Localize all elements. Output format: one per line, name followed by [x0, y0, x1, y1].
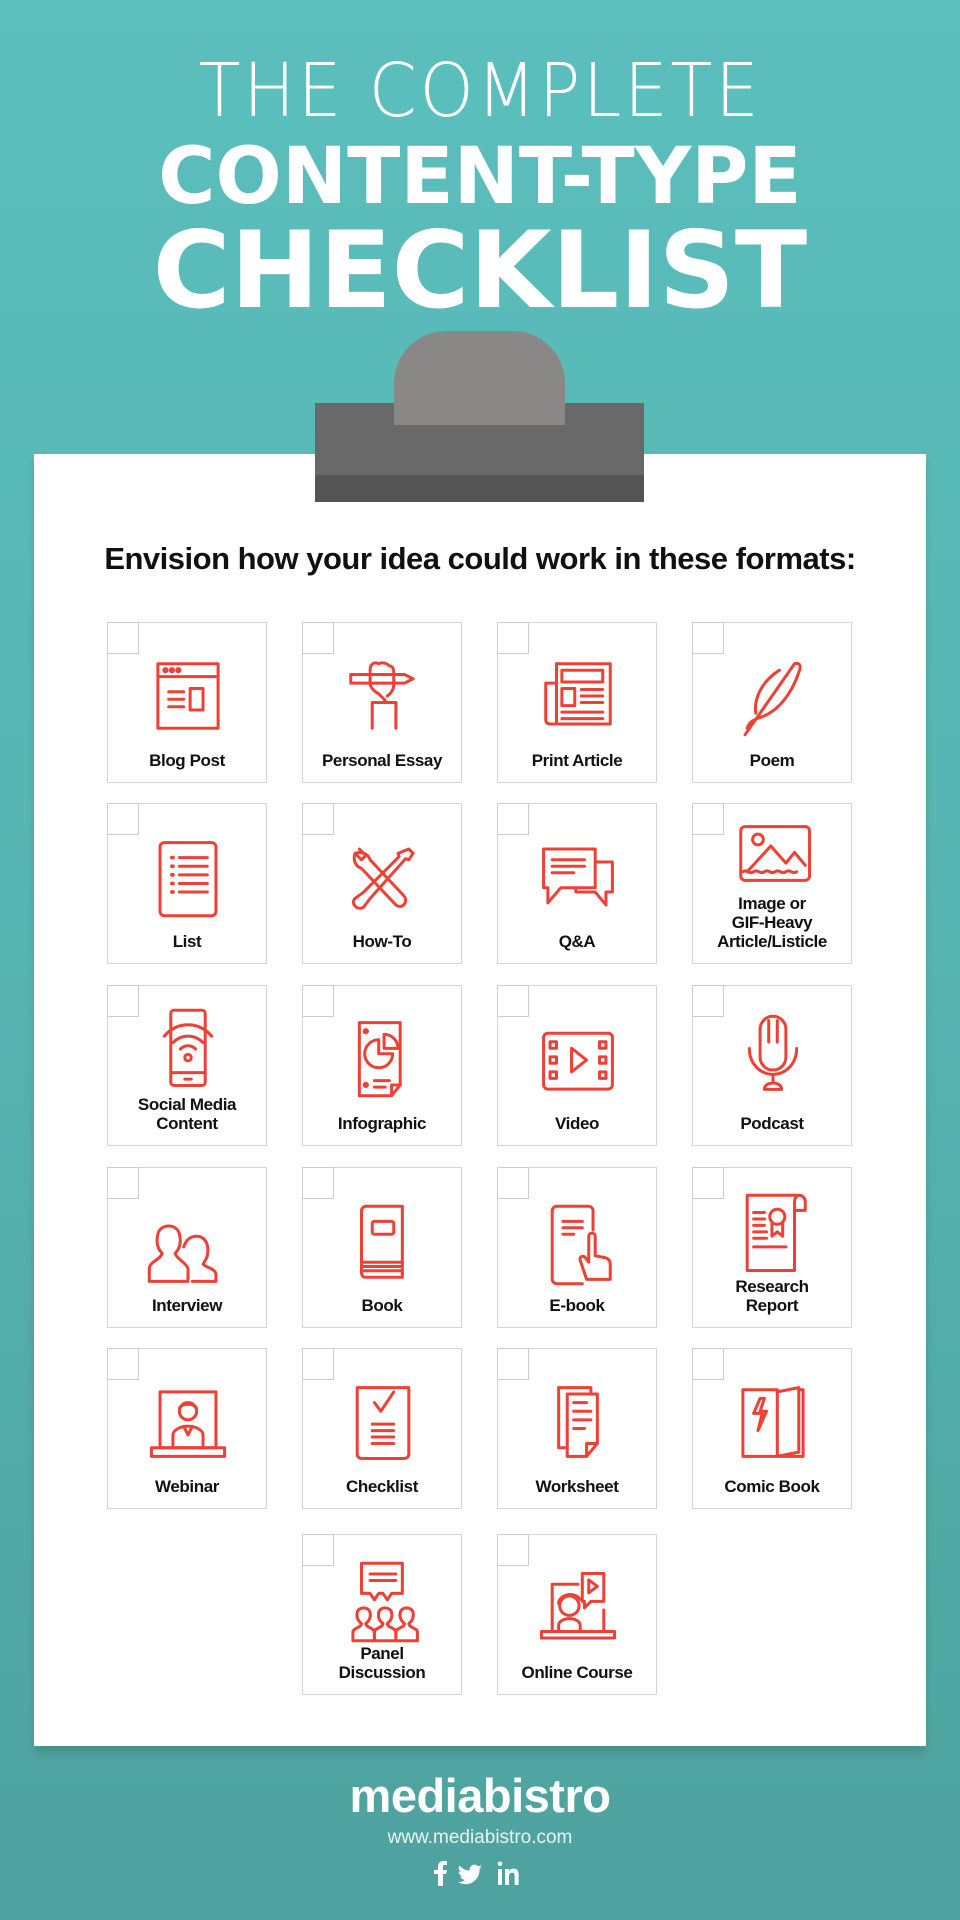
card: Checklist [302, 1348, 462, 1509]
card: Worksheet [497, 1348, 657, 1509]
card: Research Report: Report [746, 1296, 798, 1315]
icon: two people [148, 1224, 218, 1283]
card: List [107, 803, 267, 964]
card: Q&A: Q&A [559, 932, 595, 951]
card: Infographic: Infographic [338, 1114, 426, 1133]
card: Image or GIF-Heavy Article/Listicle: GIF-Heavy [732, 913, 812, 932]
card: Personal Essay [302, 622, 462, 783]
icon: worksheet [557, 1386, 599, 1458]
card: Webinar [107, 1348, 267, 1509]
icon: chat bubbles [542, 848, 614, 906]
icon: microphone [748, 1014, 798, 1091]
card: Social Media Content: Content [156, 1114, 218, 1133]
card: Panel Discussion: Discussion [339, 1663, 425, 1682]
card: Q&A [497, 803, 657, 964]
card: How-To [302, 803, 462, 964]
icon: online course [540, 1572, 616, 1640]
card: E-book [497, 1167, 657, 1328]
card: Image or GIF-Heavy Article/Listicle: Article/Listicle [717, 932, 827, 951]
card: Webinar: Webinar [155, 1477, 219, 1496]
icon: laptop person [150, 1390, 226, 1458]
icon: hand with pen [349, 661, 415, 730]
logo: mediabistro [350, 1769, 610, 1822]
card: Poem [692, 622, 852, 783]
card: Print Article: Print Article [532, 751, 622, 770]
card: Panel Discussion [302, 1534, 462, 1695]
icon: film [542, 1032, 614, 1091]
card: Social Media Content: Social Media [138, 1095, 236, 1114]
card: Blog Post [107, 622, 267, 783]
card: Poem: Poem [750, 751, 794, 770]
icon: comic book [741, 1386, 805, 1458]
card: Online Course: Online Course [522, 1663, 632, 1682]
icon: list [158, 841, 218, 918]
card: E-book: E-book [549, 1296, 605, 1315]
card: Podcast [692, 985, 852, 1146]
social icons [434, 1861, 519, 1886]
card: Infographic [302, 985, 462, 1146]
card: Video [497, 985, 657, 1146]
card: Comic Book: Comic Book [724, 1477, 820, 1496]
panel: checklist board [34, 454, 926, 1746]
title [153, 48, 807, 332]
card: Book [302, 1167, 462, 1328]
card: Interview: Interview [152, 1296, 222, 1315]
icon: report scroll [746, 1194, 807, 1272]
card: Panel Discussion: Panel [360, 1644, 404, 1663]
card: Podcast: Podcast [740, 1114, 804, 1133]
card: Book: Book [362, 1296, 402, 1315]
icon: panel discussion [351, 1562, 419, 1642]
icon: tablet with hand [550, 1204, 612, 1286]
icon: tools [352, 848, 415, 910]
icon: newspaper [544, 662, 612, 726]
card: Blog Post: Blog Post [149, 751, 225, 770]
card: Worksheet: Worksheet [535, 1477, 618, 1496]
icon: infographic doc [358, 1021, 402, 1098]
footer [350, 1769, 610, 1886]
card: Personal Essay: Personal Essay [322, 751, 442, 770]
icon: phone wifi [162, 1008, 214, 1087]
url: www.mediabistro.com [388, 1827, 572, 1848]
card: Video: Video [555, 1114, 599, 1133]
card: Image or GIF-Heavy Article/Listicle: Image or [738, 894, 806, 913]
icon: checklist [356, 1386, 410, 1460]
icon: book [360, 1204, 404, 1279]
title line 2: CONTENT-TYPE [158, 132, 802, 222]
card: List: List [173, 932, 201, 951]
card: Online Course [497, 1534, 657, 1695]
subheading: Envision how your idea could work in these formats: [104, 541, 856, 576]
title line 3: CHECKLIST [153, 209, 807, 332]
card: Interview [107, 1167, 267, 1328]
icon: blog post [156, 662, 220, 730]
card: How-To: How-To [353, 932, 411, 951]
card: Research Report: Research [735, 1277, 809, 1296]
card: Research Report [692, 1167, 852, 1328]
clip [315, 331, 644, 502]
icon: feather [744, 662, 802, 736]
card: Print Article [497, 622, 657, 783]
card: Image or GIF-Heavy Article/Listicle [692, 803, 852, 964]
card: Checklist: Checklist [346, 1477, 418, 1496]
icon: image [739, 825, 812, 882]
card: Social Media Content [107, 985, 267, 1146]
title line 1: THE COMPLETE [198, 48, 762, 134]
card: Comic Book [692, 1348, 852, 1509]
